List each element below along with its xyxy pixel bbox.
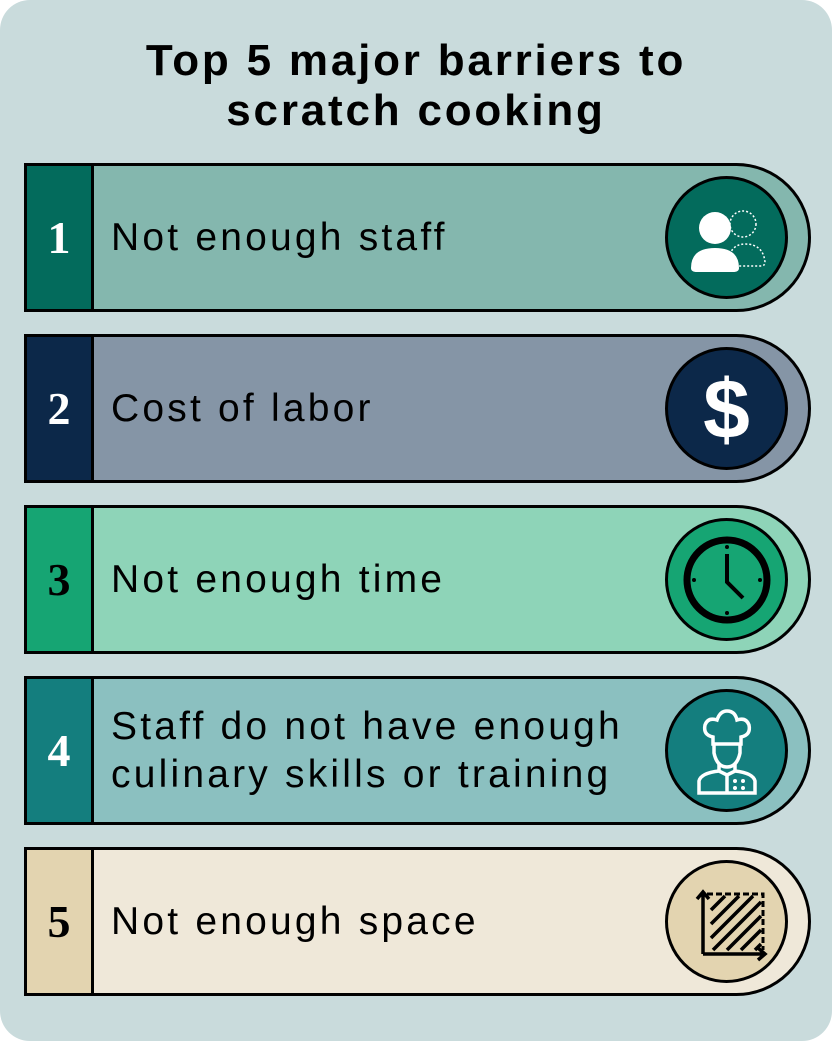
row 4: skills — [24, 676, 811, 825]
number 5: 5 — [48, 896, 70, 947]
text 5: Not enough space — [111, 900, 479, 942]
number 1 — [27, 166, 94, 309]
number 3: 3 — [48, 554, 70, 605]
title: scratch cooking — [226, 86, 606, 135]
number 3 — [27, 508, 94, 651]
row 5: not enough space — [24, 847, 811, 996]
text 4: culinary skills or training — [111, 752, 611, 796]
icon: people — [665, 176, 788, 299]
title — [146, 36, 686, 135]
text 3: Not enough time — [111, 558, 445, 600]
title: Top 5 major barriers to — [146, 36, 686, 85]
number 4 — [27, 679, 94, 822]
row 1: not enough staff — [24, 163, 811, 312]
icon: clock — [665, 518, 788, 641]
row 2: cost of labor — [24, 334, 811, 483]
number 5 — [27, 850, 94, 993]
number 2: 2 — [48, 383, 70, 434]
icon: dollar — [665, 347, 788, 470]
text 4 — [111, 704, 623, 796]
number 4: 4 — [48, 725, 70, 776]
text 4: Staff do not have enough — [111, 704, 623, 748]
text 1: Not enough staff — [111, 216, 448, 258]
text 2: Cost of labor — [111, 386, 374, 430]
icon: chef — [665, 689, 788, 812]
icon: dollar: $ — [703, 362, 750, 456]
number 2 — [27, 337, 94, 480]
number 1: 1 — [48, 212, 70, 263]
icon: area — [665, 860, 788, 983]
row 3: not enough time — [24, 505, 811, 654]
